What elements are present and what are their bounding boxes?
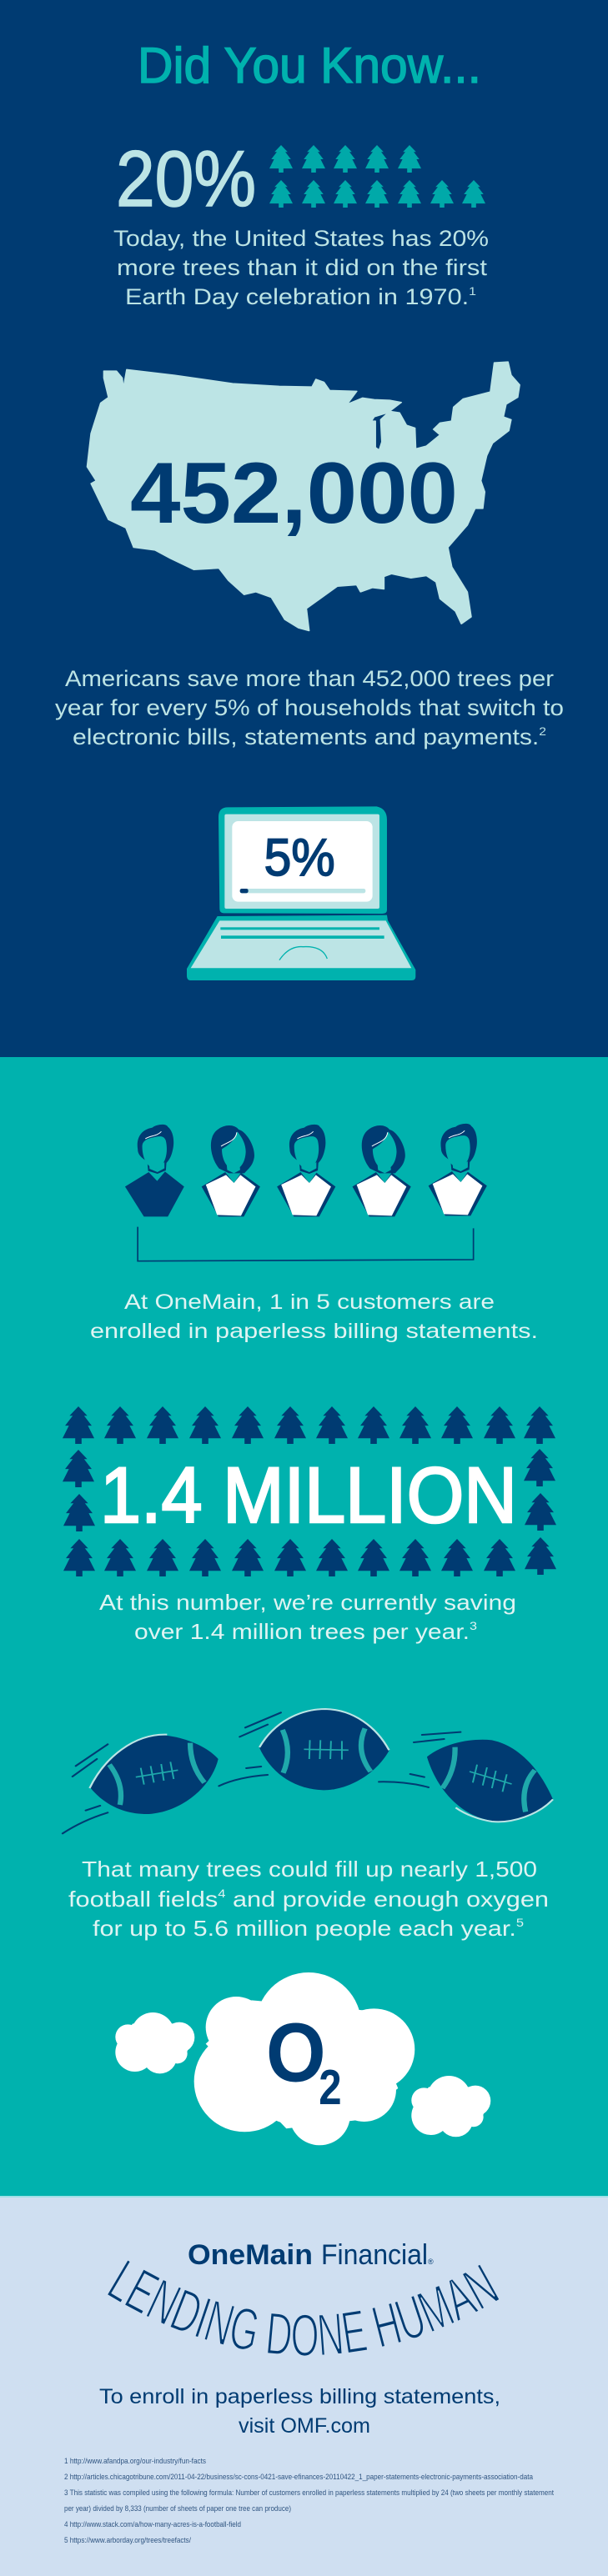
text: football fields and oxygen: and provide enough oxygen	[225, 1887, 549, 1912]
text: trees fact: Earth Day celebration in 1970.	[125, 284, 428, 309]
icon: oxygen clouds	[115, 1972, 490, 2145]
text: trees saved: At this number, we’re currently saving	[99, 1590, 516, 1615]
text: football fields and oxygen: for up to 5.6 million people each year.	[93, 1916, 453, 1941]
small cloud right	[411, 2076, 490, 2137]
main cloud	[194, 1972, 415, 2145]
text: OneMain customers	[90, 1291, 538, 1343]
football 3	[427, 1740, 553, 1822]
tagline: lending done human	[108, 2261, 499, 2356]
text: trees fact: more trees than it did on the first	[117, 255, 488, 280]
text: trees saved	[99, 1590, 516, 1644]
big stat: 1.4 million: 1.4 MILLION	[100, 1451, 517, 1540]
text: trees fact	[113, 226, 489, 309]
big stat: 20%: 20%	[116, 135, 256, 223]
icon: row of teal trees	[269, 145, 485, 208]
text: trees fact: 1	[469, 284, 476, 298]
logo: OneMain Financial	[188, 2239, 434, 2271]
text: football fields and oxygen: That many trees could fill up nearly 1,500	[82, 1857, 537, 1882]
logo: OneMain Financial: Financial	[321, 2239, 428, 2271]
icon: laptop showing 5%: 5%	[264, 829, 335, 887]
title: Did You Know...	[138, 38, 481, 93]
text: football fields and oxygen: 4	[218, 1887, 226, 1900]
logo: OneMain Financial: ®	[428, 2258, 434, 2266]
text: OneMain customers: enrolled in paperless billing statements.	[90, 1320, 538, 1343]
logo: OneMain Financial: OneMain	[188, 2239, 313, 2271]
text: trees saved: over 1.4 million trees per year.	[134, 1619, 425, 1644]
map of the United States	[88, 362, 520, 631]
footnotes: 1 http://www.afandpa.org/our-industry/fun-facts	[64, 2457, 206, 2466]
panel: navy section	[0, 0, 608, 1057]
icon: five customers	[125, 1124, 487, 1261]
icon: laptop showing 5%	[187, 806, 415, 980]
O2 label: O	[266, 2007, 326, 2100]
person 3	[277, 1125, 335, 1216]
text: football fields and oxygen: football fields	[68, 1887, 195, 1912]
text: football fields and oxygen	[68, 1857, 549, 1941]
text: football fields and oxygen: 5	[516, 1916, 524, 1929]
footnotes	[64, 2457, 554, 2545]
icon: three footballs	[63, 1709, 553, 1833]
footnotes: 2 http://articles.chicagotribune.com/2011-04-22/business/sc-cons-0421-save-efinances-20110422_1_paper-statements-electronic-payments-association-data	[64, 2473, 534, 2482]
text: OneMain customers: At OneMain, 1 in 5 customers are	[124, 1291, 495, 1314]
tagline: lending done human: LENDING DONE HUMAN	[108, 2261, 499, 2356]
text: bills fact	[55, 666, 564, 749]
person 4	[353, 1125, 411, 1216]
person 2	[202, 1125, 260, 1216]
person 1: enrolled customer	[125, 1125, 184, 1216]
map figure: 452,000: 452,000	[130, 445, 458, 542]
text: bills fact: year for every 5% of households that switch to	[55, 695, 564, 720]
football 2	[259, 1709, 389, 1790]
bracket under customer one to five	[138, 1227, 474, 1261]
footnotes: 4 http://www.stack.com/a/how-many-acres-is-a-football-field	[64, 2520, 241, 2529]
text: bills fact: 2	[539, 724, 546, 738]
person 5	[429, 1124, 487, 1215]
icon: frame of navy trees	[63, 1406, 556, 1576]
small cloud left	[115, 2012, 194, 2073]
text: call to action: To enroll in paperless billing statements,	[99, 2385, 500, 2408]
text: bills fact: electronic bills, statements and payments.	[73, 724, 490, 749]
O2 label: 2	[319, 2059, 342, 2115]
text: call to action: visit OMF.com	[239, 2414, 370, 2438]
footnotes: 5 https://www.arborday.org/trees/treefacts/	[64, 2536, 191, 2545]
text: call to action	[99, 2385, 500, 2438]
text: bills fact: Americans save more than 452,000 trees per	[65, 666, 554, 691]
text: trees fact: Today, the United States has 20%	[113, 226, 489, 251]
panel: teal section	[0, 1057, 608, 2196]
football 1	[89, 1735, 219, 1814]
footnotes: per year) divided by 8,333 (number of sheets of paper one tree can produce)	[64, 2504, 291, 2513]
panel: footer	[0, 2196, 608, 2576]
text: trees saved: 3	[470, 1619, 477, 1632]
motion lines	[63, 1712, 460, 1833]
